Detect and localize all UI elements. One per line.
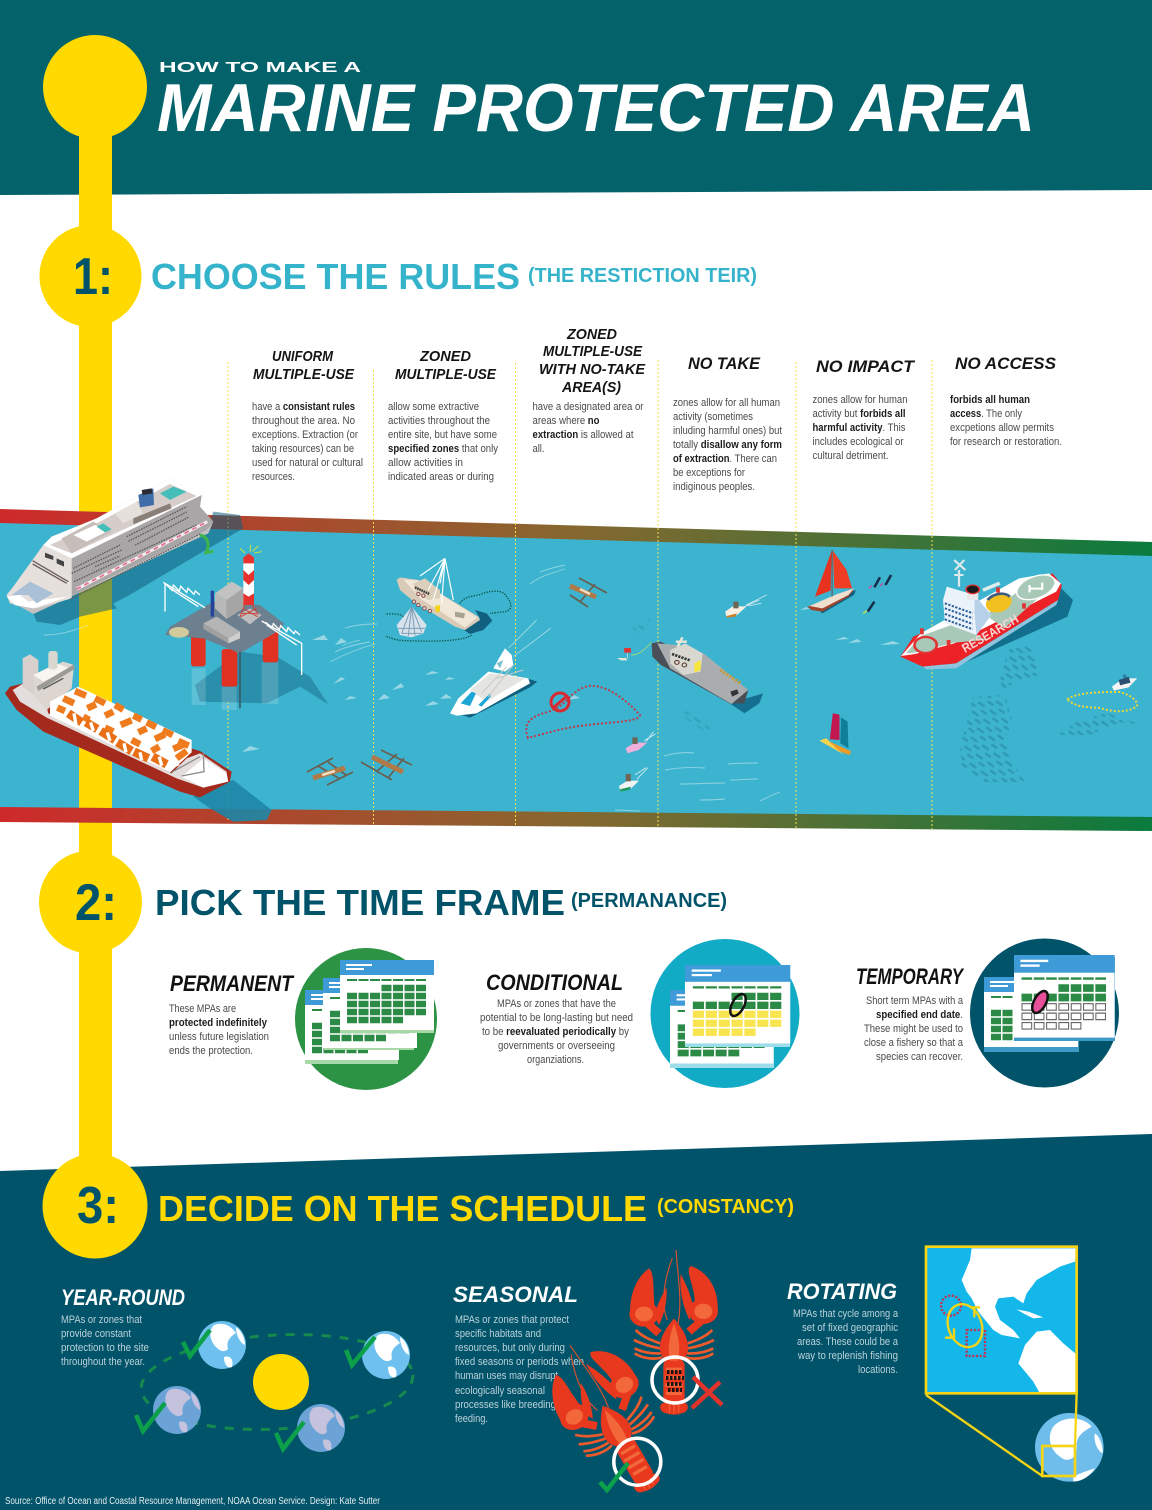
column: zoned multiple-use: MULTIPLE-USE <box>395 366 497 383</box>
column: no take: be exceptions for <box>673 467 745 479</box>
column: no take: zones allow for all human <box>673 397 780 409</box>
yellow dotted buffer zone <box>1067 692 1137 711</box>
rotating heading: ROTATING <box>787 1279 897 1304</box>
column: zoned multiple-use with no-take areas: areas where no <box>532 415 600 427</box>
year-round description: throughout the year. <box>61 1356 145 1368</box>
fish schools <box>628 618 1142 782</box>
small catamaran <box>819 713 851 755</box>
red sailboat <box>808 550 856 613</box>
column: uniform multiple-use: have a consistant rules <box>252 401 355 413</box>
ocean panel <box>0 520 1152 820</box>
permanent description: These MPAs are <box>169 1003 236 1015</box>
jet skis <box>619 595 1137 792</box>
column: no impact: cultural detriment. <box>812 450 888 462</box>
conditional description: potential to be long-lasting but need <box>480 1012 633 1024</box>
column: uniform multiple-use: exceptions. Extraction (or <box>252 429 358 441</box>
rotating description: set of fixed geographic <box>802 1322 898 1334</box>
seasonal description <box>455 1314 584 1425</box>
column: zoned multiple-use with no-take areas: AREA(S) <box>561 379 621 396</box>
column: no take <box>673 354 782 493</box>
permanent calendar icon <box>295 948 437 1090</box>
source credit: Source: Office of Ocean and Coastal Resource Management, NOAA Ocean Service. Design: Kate Sutter <box>5 1496 381 1507</box>
seasonal description: fixed seasons or periods when <box>455 1356 584 1368</box>
top yellow circle <box>43 35 147 139</box>
step 3 marker: 3: <box>77 1177 119 1235</box>
column: zoned multiple-use: ZONED <box>419 348 471 365</box>
step 1 heading: CHOOSE THE RULES <box>151 256 520 297</box>
research ship label: RESEARCH <box>960 612 1021 656</box>
conditional description <box>480 998 633 1066</box>
fishing trawler <box>385 558 511 641</box>
permanent description: ends the protection. <box>169 1045 253 1057</box>
title kicker: HOW TO MAKE A <box>159 59 361 76</box>
yellow timeline bar <box>79 85 112 1210</box>
map inset and globe <box>926 1247 1104 1482</box>
seasonal description: human uses may disrupt <box>455 1370 558 1382</box>
column: no impact: harmful activity. This <box>812 422 906 434</box>
column: zoned multiple-use with no-take areas: extraction is allowed at <box>532 429 634 441</box>
column: zoned multiple-use with no-take areas: all. <box>532 443 544 455</box>
gray patrol ship <box>652 637 763 713</box>
column: zoned multiple-use: specified zones that only <box>388 443 498 455</box>
step 1 marker: 1: <box>73 248 113 306</box>
top gradient strip <box>0 509 1152 556</box>
column: no take: indiginous peoples. <box>673 481 755 493</box>
column: zoned multiple-use: indicated areas or during <box>388 471 494 483</box>
section 3 background <box>0 1134 1152 1510</box>
column: no take: totally disallow any form <box>673 439 782 451</box>
seasonal description: specific habitats and <box>455 1328 541 1340</box>
column: zoned multiple-use with no-take areas <box>532 326 646 455</box>
year-round description <box>61 1314 149 1368</box>
conditional description: MPAs or zones that have the <box>497 998 616 1010</box>
title main: MARINE PROTECTED AREA <box>157 70 1035 146</box>
column: no impact: zones allow for human <box>812 394 908 406</box>
seasonal description: feeding. <box>455 1413 488 1425</box>
column: zoned multiple-use: entire site, but have some <box>388 429 497 441</box>
rotating description: locations. <box>858 1364 898 1376</box>
permanent heading: PERMANENT <box>170 971 294 996</box>
year-round description: provide constant <box>61 1328 131 1340</box>
temporary calendar icon <box>970 938 1119 1088</box>
rotating option <box>787 1247 1104 1482</box>
title <box>157 59 1035 146</box>
column: no take: of extraction. There can <box>673 453 777 465</box>
column: zoned multiple-use <box>388 348 498 483</box>
column: uniform multiple-use: taking resources) can be <box>252 443 354 455</box>
seasonal description: MPAs or zones that protect <box>455 1314 569 1326</box>
column: no access <box>950 354 1062 448</box>
column: no access: NO ACCESS <box>955 354 1057 373</box>
conditional calendar icon <box>650 939 800 1088</box>
temporary description: close a fishery so that a <box>864 1037 964 1049</box>
step 1 marker <box>40 225 142 327</box>
column: zoned multiple-use: activities throughout the <box>388 415 490 427</box>
step 3 heading: (CONSTANCY) <box>657 1196 794 1218</box>
conditional description: to be reevaluated periodically by <box>482 1026 629 1038</box>
column: no impact: includes ecological or <box>812 436 904 448</box>
research ship <box>900 560 1073 669</box>
rotating description: way to replenish fishing <box>797 1350 898 1362</box>
conditional description: governments or overseeing <box>498 1040 615 1052</box>
outrigger canoes <box>307 578 607 785</box>
column: no impact: activity but forbids all <box>812 408 906 420</box>
seasonal heading: SEASONAL <box>453 1282 578 1307</box>
column: uniform multiple-use: resources. <box>252 471 295 483</box>
conditional option <box>480 939 800 1088</box>
temporary option <box>856 938 1119 1088</box>
buoy and line <box>618 642 652 660</box>
seasonal description: ecologically seasonal <box>455 1385 545 1397</box>
rotating description: areas. These could be a <box>797 1336 899 1348</box>
step 3 marker <box>42 1154 148 1258</box>
cargo containers <box>50 687 192 772</box>
step 1 heading: (THE RESTICTION TEIR) <box>528 265 757 287</box>
seasonal description: processes like breeding <box>455 1399 556 1411</box>
step 3 heading: DECIDE ON THE SCHEDULE <box>158 1188 647 1229</box>
temporary description: species can recover. <box>876 1051 963 1063</box>
year-round description: protection to the site <box>61 1342 149 1354</box>
column: uniform multiple-use <box>252 348 363 483</box>
bottom gradient strip <box>0 807 1152 831</box>
rotating description: MPAs that cycle among a <box>793 1308 899 1320</box>
permanent option <box>169 948 437 1090</box>
step 1 heading <box>151 256 757 297</box>
lobster without eggs, allowed <box>530 1324 689 1510</box>
column: no access: forbids all human <box>950 394 1030 406</box>
cargo ship <box>5 651 272 822</box>
permanent description: protected indefinitely <box>169 1017 268 1029</box>
oil rig <box>163 545 328 710</box>
rotating description <box>793 1308 899 1376</box>
permanent description: unless future legislation <box>169 1031 269 1043</box>
temporary description: Short term MPAs with a <box>866 995 964 1007</box>
column: zoned multiple-use with no-take areas: have a designated area or <box>532 401 644 413</box>
column divider lines <box>228 360 932 829</box>
column: zoned multiple-use: allow some extractive <box>388 401 479 413</box>
year-round heading: YEAR-ROUND <box>61 1285 185 1310</box>
column: zoned multiple-use with no-take areas: ZONED <box>566 326 617 343</box>
header band <box>0 0 1152 195</box>
seasonal option <box>453 1250 722 1510</box>
column: no impact <box>812 357 916 462</box>
column: no access: excpetions allow permits <box>950 422 1054 434</box>
divers <box>863 575 891 613</box>
step 2 heading: PICK THE TIME FRAME <box>155 882 565 923</box>
column: uniform multiple-use: UNIFORM <box>272 348 333 365</box>
year-round description: MPAs or zones that <box>61 1314 142 1326</box>
column: uniform multiple-use: MULTIPLE-USE <box>253 366 355 383</box>
year-round option <box>61 1285 415 1452</box>
light wave lines <box>44 565 780 811</box>
column: zoned multiple-use with no-take areas: MULTIPLE-USE <box>543 343 643 360</box>
column: zoned multiple-use: allow activities in <box>388 457 463 469</box>
permanent description <box>169 1003 269 1057</box>
temporary description <box>864 995 964 1063</box>
lobster with eggs, not allowed <box>629 1250 722 1415</box>
red dotted no-fishing zone <box>526 686 640 738</box>
water ripples and waves <box>242 607 900 752</box>
seasonal description: resources, but only during <box>455 1342 565 1354</box>
step 2 heading: (PERMANANCE) <box>571 890 727 912</box>
sport fishing boat <box>450 620 551 718</box>
column: uniform multiple-use: throughout the area. No <box>252 415 355 427</box>
conditional description: organziations. <box>527 1054 584 1066</box>
column: no access: access. The only <box>950 408 1022 420</box>
step 2 marker: 2: <box>75 874 117 932</box>
temporary description: specified end date. <box>876 1009 963 1021</box>
column: no take: activity (sometimes <box>673 411 753 423</box>
temporary description: These might be used to <box>864 1023 963 1035</box>
conditional heading: CONDITIONAL <box>486 970 623 995</box>
cruise ship <box>7 478 243 625</box>
column: no access: for research or restoration. <box>950 436 1062 448</box>
step 2 marker <box>39 850 142 954</box>
orbit diagram <box>136 1321 415 1452</box>
column: no take: inluding harmful ones) but <box>673 425 782 437</box>
column: zoned multiple-use with no-take areas: WITH NO-TAKE <box>539 361 646 378</box>
column: no take: NO TAKE <box>688 354 761 373</box>
column: uniform multiple-use: used for natural or cultural <box>252 457 363 469</box>
column: no impact: NO IMPACT <box>816 357 916 376</box>
temporary heading: TEMPORARY <box>856 964 965 989</box>
